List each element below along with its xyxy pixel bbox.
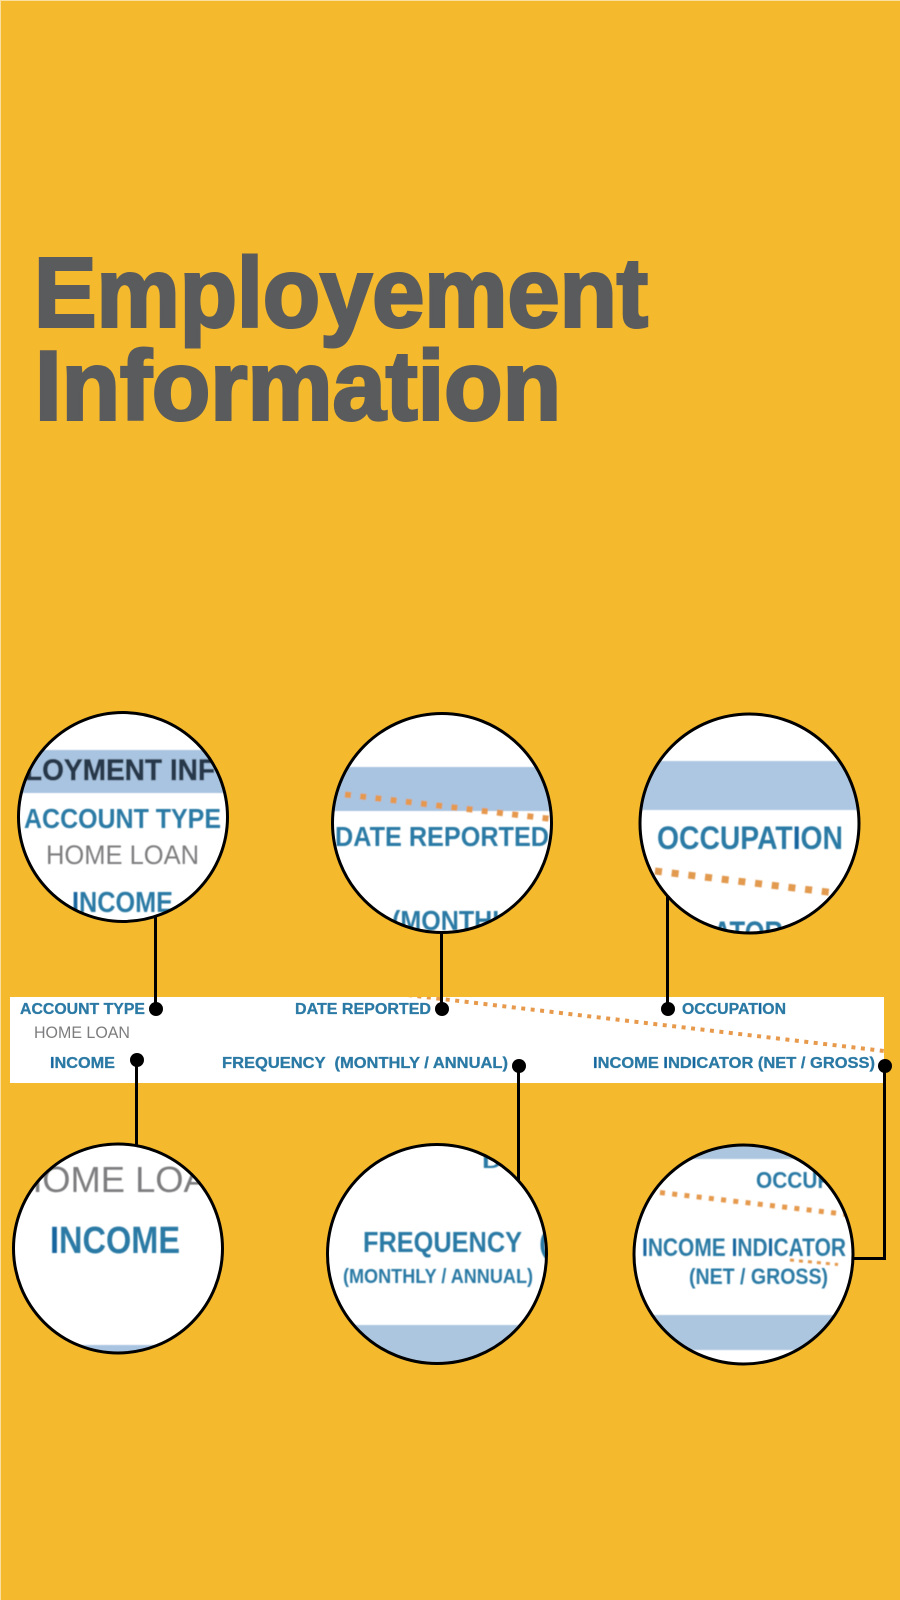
- connector: income indicator: [850, 1059, 892, 1258]
- magnifier: income indicator: OCCUPAT: [756, 1167, 856, 1193]
- magnifier: income: HOME LOAN: [16, 1159, 234, 1200]
- magnifier: occupation: [638, 712, 860, 934]
- connector: frequency: [512, 1059, 526, 1180]
- magnifier: frequency: DA: [482, 1152, 522, 1173]
- title: Employement: [34, 238, 648, 348]
- label: account type: ACCOUNT TYPE: [20, 1001, 145, 1018]
- magnifier: date reported: (MONTHLY: [392, 905, 522, 936]
- panel: form strip: [10, 995, 884, 1083]
- magnifier: income: [10, 1144, 234, 1365]
- label: date reported: DATE REPORTED: [295, 1001, 431, 1018]
- magnifier: account type: [10, 712, 240, 922]
- magnifier: account type: HOME LOAN: [46, 840, 199, 870]
- title: [34, 238, 648, 440]
- magnifier: occupation: OCCUPATION: [657, 820, 843, 856]
- magnifier: account type: ACCOUNT TYPE: [24, 803, 221, 834]
- connector: account type: [149, 915, 163, 1016]
- magnifier: date reported: DATE REPORTED: [335, 821, 549, 852]
- magnifier: income: INCOME: [50, 1220, 180, 1262]
- magnifier: account type: LOYMENT INF: [25, 754, 215, 787]
- title: Information: [35, 330, 561, 440]
- connector: date reported: [435, 930, 449, 1016]
- magnifier: income indicator: INCOME INDICATOR: [642, 1234, 846, 1262]
- label: occupation: OCCUPATION: [682, 1001, 786, 1018]
- magnifier: income indicator: [625, 1140, 865, 1364]
- label: income indicator: INCOME INDICATOR (NET / GROSS): [593, 1055, 875, 1072]
- label: home loan: HOME LOAN: [34, 1024, 130, 1042]
- magnifier: frequency: FREQUENCY: [363, 1227, 522, 1259]
- magnifier: account type: INCOME: [72, 887, 173, 919]
- dotted orange line: [408, 995, 884, 1051]
- label: frequency: FREQUENCY (MONTHLY / ANNUAL): [222, 1055, 508, 1072]
- magnifier: date reported: [325, 713, 560, 936]
- connector: occupation: [661, 895, 675, 1016]
- connector: income: [130, 1053, 144, 1146]
- magnifier: frequency: [320, 1144, 555, 1370]
- magnifier: frequency: (MONTHLY / ANNUAL): [343, 1266, 533, 1288]
- magnifier: occupation: ATOR: [713, 915, 783, 951]
- magnifier: frequency: (: [539, 1227, 549, 1259]
- label: income: INCOME: [50, 1055, 115, 1072]
- magnifier: income indicator: (NET / GROSS): [689, 1264, 828, 1289]
